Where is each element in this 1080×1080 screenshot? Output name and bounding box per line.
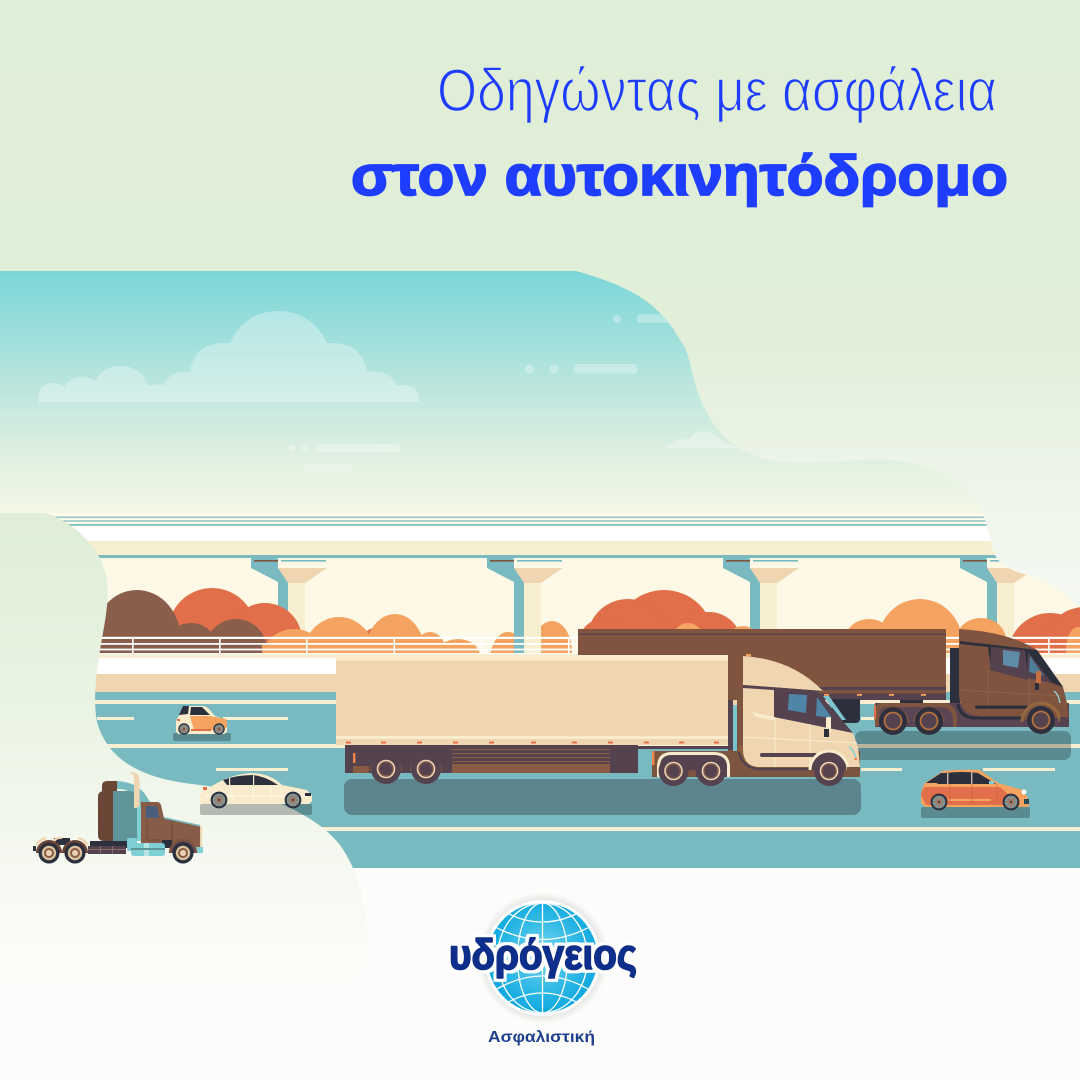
car: white sedan [199,773,312,808]
overpass bridge [0,513,1080,654]
sky dots and dashes [288,314,687,472]
panel: left background blob [0,513,367,985]
car shadow: small car [173,733,231,741]
car shadow: white car [200,804,312,815]
logo subtitle: Ασφαλιστική [488,1029,595,1046]
guard rail [0,637,1080,655]
panel: top background blob [0,0,1080,607]
car: orange hatchback [921,770,1029,810]
trees [100,588,1080,653]
truck shadow: brown truck [855,731,1071,760]
title line 2: στον αυτοκινητόδρομο [351,144,1008,208]
bottom band [0,868,1080,1080]
road [0,654,1080,868]
title line 1: Οδηγώντας με ασφάλεια [437,57,997,124]
truck: beige [336,654,860,786]
truck shadow: beige truck [344,779,861,815]
title [351,57,1008,208]
large cloud [38,311,419,402]
truck: small brown tractor on left [33,772,203,864]
pillar base in front of trees [514,583,541,654]
car shadow: orange car [921,807,1030,818]
car: small orange city car [176,706,227,735]
logo globe grid [496,903,588,1013]
logo: Ydrogeios [449,892,637,1046]
logo wordmark: υδρόγειος [449,931,637,979]
small cloud [665,431,738,448]
sky [0,271,1080,516]
truck: brown [578,629,1069,735]
